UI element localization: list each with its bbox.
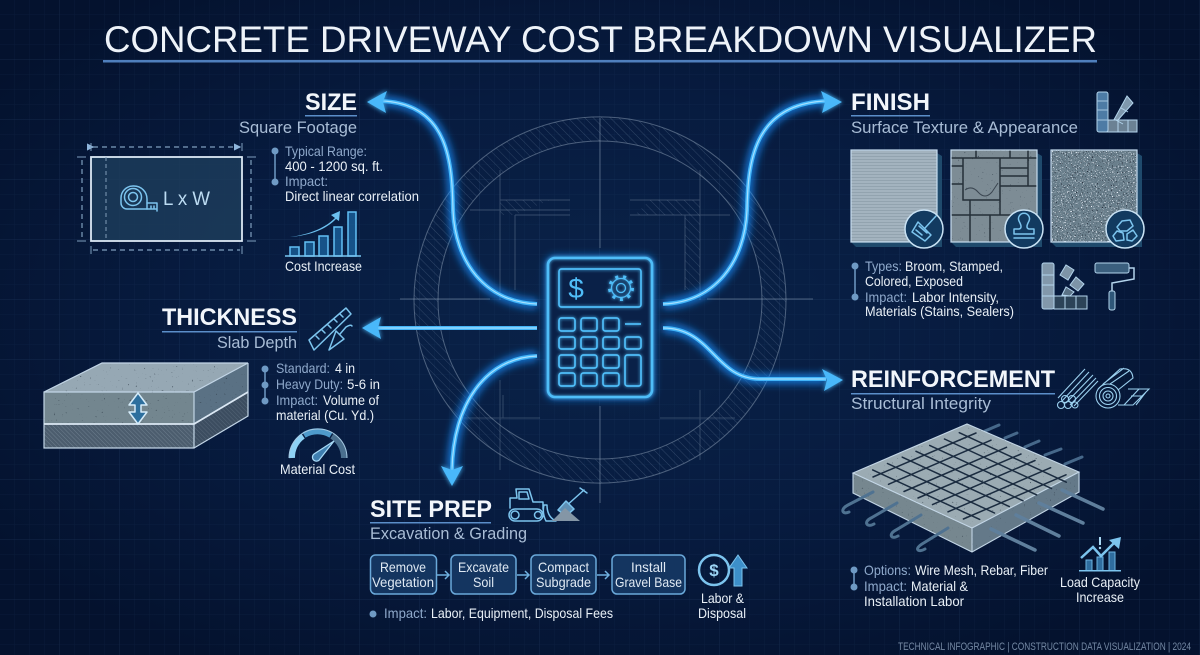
diagram: reinforced slab <box>843 424 1103 552</box>
icon: load capacity chart <box>1079 537 1121 572</box>
heading: thickness: Slab Depth <box>217 333 297 352</box>
label: labor and disposal <box>698 590 746 621</box>
icon: wire mesh roll <box>1096 368 1149 408</box>
text block: reinforcement details: Impact: <box>864 578 907 594</box>
panel: site prep <box>370 488 747 621</box>
icon: swatch fan large <box>1042 263 1087 309</box>
title: CONCRETE DRIVEWAY COST BREAKDOWN VISUALIZER <box>104 19 1097 60</box>
icon: calculator <box>548 258 652 397</box>
process flow: four steps <box>370 555 685 594</box>
arrow: to size <box>367 91 537 304</box>
process flow: four steps: Gravel Base <box>615 574 682 590</box>
heading: thickness: THICKNESS <box>162 304 297 331</box>
text block: thickness details: Heavy Duty: <box>276 376 343 392</box>
icon: rebar bundle <box>1058 369 1098 408</box>
text block: finish details: Types: <box>865 258 902 274</box>
text block: thickness details: material (Cu. Yd.) <box>276 407 374 423</box>
text block: size details: Direct linear correlation <box>285 188 419 204</box>
heading: finish: FINISH <box>851 89 930 116</box>
heading: finish <box>851 89 1078 137</box>
text block: size details <box>272 143 419 204</box>
label: load capacity increase: Load Capacity <box>1060 574 1140 590</box>
texture: broom finish <box>851 150 943 248</box>
central blueprint sketch <box>400 117 813 503</box>
icon: material cost gauge <box>289 429 347 461</box>
text block: thickness details: 4 in <box>335 360 355 376</box>
label: labor and disposal: Labor & <box>701 590 745 606</box>
process flow: four steps: Subgrade <box>536 574 591 590</box>
process flow: four steps: Compact <box>538 559 589 575</box>
heading: size: SIZE <box>305 89 357 116</box>
wire mesh grid <box>873 433 1066 519</box>
chart: cost increase: Cost Increase <box>285 258 362 274</box>
chart: cost increase <box>285 211 362 274</box>
label: load capacity increase: Increase <box>1076 589 1124 605</box>
icon: depth arrow <box>129 393 147 424</box>
text block: thickness details <box>262 360 380 423</box>
icon: bulldozer and shovel <box>509 488 587 521</box>
icon: aggregate badge <box>1106 210 1144 248</box>
panel: finish <box>851 89 1144 319</box>
heading: finish: Surface Texture & Appearance <box>851 118 1078 137</box>
label: load capacity increase <box>1060 574 1140 605</box>
heading: site prep: Excavation & Grading <box>370 524 527 543</box>
label: material cost: Material Cost <box>280 461 355 477</box>
label: labor and disposal: Disposal <box>698 605 746 621</box>
process flow: four steps: Soil <box>473 574 494 590</box>
heading: site prep <box>370 496 527 543</box>
arrow: to reinforcement <box>663 328 843 391</box>
panel: thickness <box>44 304 380 477</box>
heading: reinforcement: REINFORCEMENT <box>851 366 1055 393</box>
icon: colour swatch fan <box>1097 92 1137 132</box>
icon: broom badge <box>905 210 943 248</box>
text block: site prep impact: Impact: <box>384 605 427 621</box>
arrow: to site prep <box>441 356 537 486</box>
text block: size details: Typical Range: <box>285 143 367 159</box>
text block: site prep impact: Labor, Equipment, Disposal Fees <box>431 605 613 621</box>
heading: reinforcement: Structural Integrity <box>851 394 991 413</box>
process flow: four steps: Excavate <box>458 559 509 575</box>
panel: size <box>77 89 419 274</box>
process flow: four steps: Vegetation <box>372 574 434 590</box>
icon: labor and disposal cost <box>699 555 747 586</box>
diagram: concrete slab cross-section <box>44 363 248 448</box>
diagram: square footage rectangle <box>77 143 256 254</box>
texture: stamped finish <box>951 150 1043 248</box>
text block: thickness details: 5-6 in <box>347 376 380 392</box>
icon: stamp badge <box>1005 210 1043 248</box>
panel: reinforcement <box>843 366 1149 609</box>
text block: reinforcement details: Wire Mesh, Rebar, Fiber <box>915 562 1048 578</box>
text block: reinforcement details <box>850 562 1048 609</box>
heading: reinforcement <box>851 366 1055 413</box>
text block: reinforcement details: Options: <box>864 562 911 578</box>
process flow: four steps: Remove <box>380 559 426 575</box>
icon: labor and disposal cost: $ <box>709 561 719 580</box>
text block: reinforcement details: Material & <box>911 578 969 594</box>
straight rebars <box>991 490 1103 550</box>
text block: thickness details: Impact: <box>276 392 318 408</box>
arrow: to thickness <box>362 317 537 339</box>
text block: finish details: Impact: <box>865 289 907 305</box>
text block: reinforcement details: Installation Labor <box>864 593 964 609</box>
text block: size details: 400 - 1200 sq. ft. <box>285 158 383 174</box>
icon: paint roller <box>1095 263 1134 310</box>
heading: size <box>239 89 357 137</box>
text block: size details: Impact: <box>285 173 328 189</box>
text block: finish details <box>852 258 1014 319</box>
text block: finish details: Colored, Exposed <box>865 273 963 289</box>
hooked rebars <box>843 492 948 551</box>
icon: tape measure <box>121 186 157 211</box>
process flow: four steps: Install <box>631 559 666 575</box>
heading: size: Square Footage <box>239 118 357 137</box>
text block: finish details: Broom, Stamped, <box>905 258 1003 274</box>
text block: finish details: Labor Intensity, <box>912 289 999 305</box>
icon: ruler and trowel <box>309 308 352 350</box>
back rebars <box>985 425 1082 464</box>
text block: thickness details: Volume of <box>323 392 379 408</box>
text block: thickness details: Standard: <box>276 360 330 376</box>
arrow: to finish <box>663 91 842 304</box>
text block: finish details: Materials (Stains, Sealers) <box>865 303 1014 319</box>
heading: site prep: SITE PREP <box>370 496 492 523</box>
icon: calculator: $ <box>568 273 584 304</box>
text block: site prep impact <box>370 605 613 621</box>
diagram: square footage rectangle: L x W <box>163 189 210 210</box>
texture: exposed aggregate finish <box>1051 150 1144 248</box>
heading: thickness <box>162 304 297 352</box>
